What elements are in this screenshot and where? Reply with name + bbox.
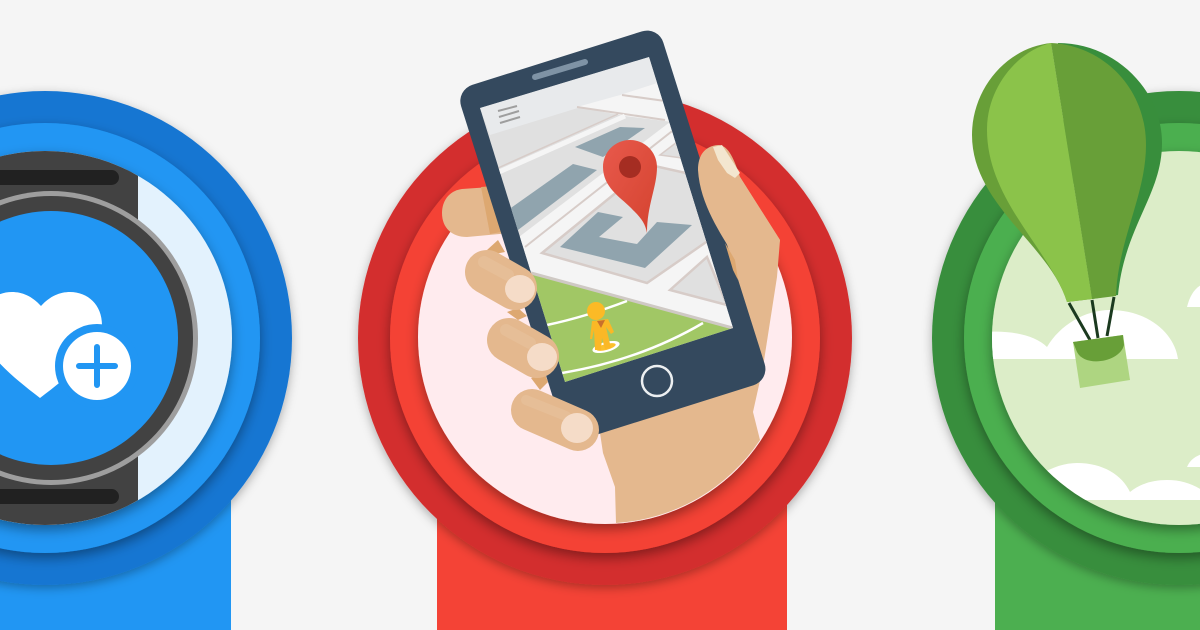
blue inner disc (0, 151, 232, 525)
blue outer ring (0, 91, 292, 585)
green middle ring (964, 123, 1200, 553)
phone body (456, 26, 770, 444)
icon: hamburger menu (498, 106, 520, 123)
balloon basket (1073, 335, 1130, 388)
watch bezel (0, 191, 198, 485)
icon: thumb (698, 145, 780, 280)
finger four (532, 410, 578, 430)
icon: map pin (603, 140, 657, 233)
finger creases (487, 240, 548, 390)
green ribbon bar (995, 490, 1200, 630)
phone speaker (535, 62, 585, 77)
red middle ring (390, 123, 820, 553)
panel: red location badge (358, 26, 852, 630)
red ribbon bar (437, 490, 787, 630)
green outer ring (932, 91, 1200, 585)
icon: smartwatch (0, 150, 198, 526)
balloon light panel (987, 43, 1092, 302)
map header band (480, 57, 660, 135)
map blue buildings (575, 127, 645, 157)
park paths (547, 301, 703, 373)
icon: hand back (442, 177, 780, 523)
balloon ropes (1069, 297, 1114, 340)
icon: hand fingers (484, 240, 593, 443)
map screen (480, 57, 733, 382)
blue middle ring (0, 123, 260, 553)
thumb nail (713, 145, 740, 178)
thumb shade (725, 243, 738, 280)
map main roads (515, 122, 740, 330)
red inner disc (418, 150, 792, 524)
balloon dark edge (1058, 43, 1162, 299)
red outer ring (358, 91, 852, 585)
watch face (0, 211, 178, 465)
balloon left edge (972, 43, 1092, 302)
panel: blue health badge (0, 91, 292, 630)
icon: clouds (985, 283, 1200, 500)
finger two (487, 272, 515, 288)
finger three (509, 340, 537, 356)
phone home button (642, 366, 672, 396)
icon: plus badge (55, 324, 139, 408)
icon: hot air balloon (972, 43, 1162, 388)
icon: street view figure (587, 302, 621, 355)
map blocks (542, 165, 712, 283)
map upper white roads (577, 83, 672, 122)
panel: green environment badge (932, 43, 1200, 630)
icon: smartphone (456, 26, 770, 444)
blue ribbon bar (0, 490, 231, 630)
icon: heart (0, 292, 102, 398)
watch strap (0, 150, 138, 526)
balloon right panel (1051, 43, 1146, 299)
map green park (531, 274, 733, 382)
green inner disc (992, 151, 1200, 525)
